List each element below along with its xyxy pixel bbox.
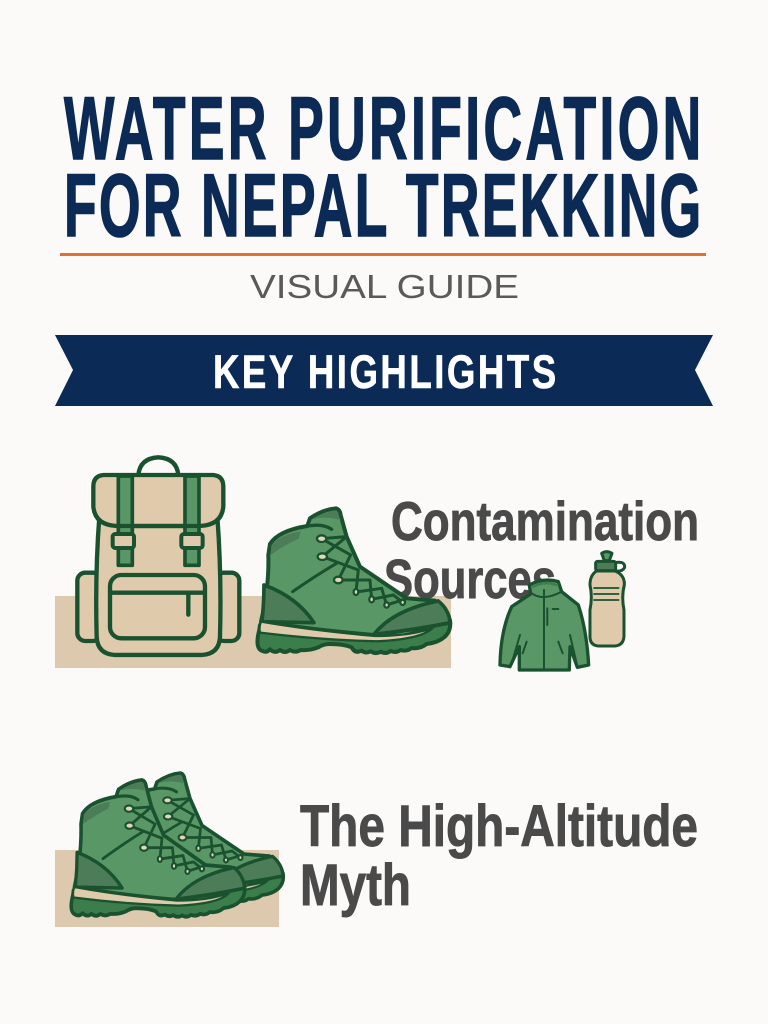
icon: hiking boot <box>257 508 450 653</box>
tan bar: first highlight <box>55 596 451 668</box>
banner: key highlights: KEY HIGHLIGHTS <box>213 346 556 398</box>
heading: the high-altitude myth: Myth <box>300 853 411 918</box>
subtitle: VISUAL GUIDE <box>250 268 519 305</box>
icon: pair of hiking boots <box>71 773 283 917</box>
banner: key highlights <box>55 335 713 406</box>
title <box>64 79 701 255</box>
heading: the high-altitude myth <box>300 794 698 918</box>
heading: contamination sources: Sources <box>384 548 556 610</box>
title: WATER PURIFICATION <box>64 79 701 178</box>
icon: jacket <box>500 580 589 670</box>
icon: water bottle <box>590 552 625 646</box>
heading: contamination sources: Contamination <box>391 490 699 552</box>
title: FOR NEPAL TREKKING <box>64 156 701 255</box>
title underline <box>60 253 706 256</box>
tan bar: second highlight <box>55 850 279 927</box>
heading: contamination sources <box>384 490 699 610</box>
icon: backpack <box>77 457 239 655</box>
